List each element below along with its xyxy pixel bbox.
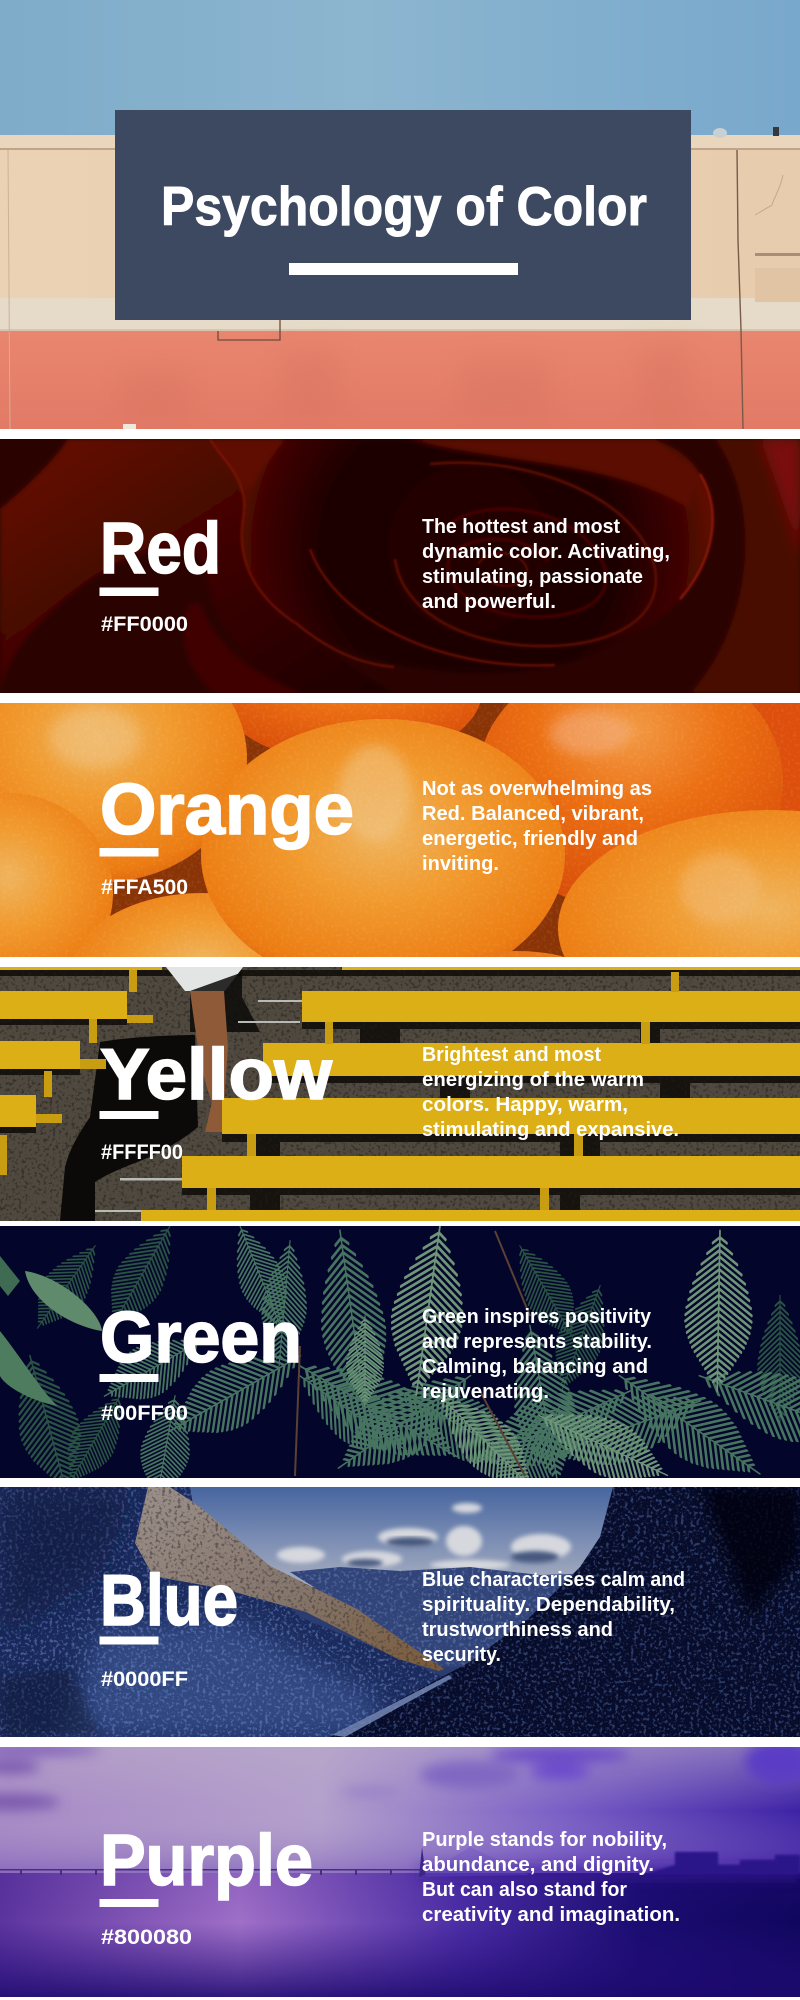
heading: Purple: Purple [100, 1821, 313, 1901]
description: stimulating and expansive. [422, 1118, 679, 1141]
description: abundance, and dignity. [422, 1853, 654, 1876]
hex code: #00FF00 [101, 1402, 188, 1425]
title underline [289, 263, 518, 275]
underline [100, 1636, 158, 1644]
description: Calming, balancing and [422, 1355, 648, 1378]
description: Blue characterises calm and [422, 1568, 685, 1591]
hex code: #FFFF00 [101, 1141, 183, 1164]
photo: oranges [0, 703, 800, 957]
photo: fern fronds [0, 1226, 800, 1478]
panel: green [0, 1214, 800, 1523]
title: Psychology of Color [161, 175, 647, 237]
description: security. [422, 1643, 501, 1666]
description: energetic, friendly and [422, 827, 638, 850]
description: The hottest and most [422, 515, 620, 538]
description: Green inspires positivity [422, 1305, 652, 1328]
description: dynamic color. Activating, [422, 540, 670, 563]
underline [100, 848, 158, 856]
underline [100, 1899, 158, 1907]
description: energizing of the warm [422, 1068, 644, 1091]
description: stimulating, passionate [422, 565, 643, 588]
description: and powerful. [422, 590, 556, 613]
description: and represents stability. [422, 1330, 652, 1353]
description: Red. Balanced, vibrant, [422, 802, 644, 825]
description: creativity and imagination. [422, 1903, 680, 1926]
title panel [115, 110, 691, 320]
heading: Red: Red [100, 509, 221, 589]
description [422, 1568, 685, 1666]
photo: red rose [0, 439, 800, 693]
description: But can also stand for [422, 1878, 627, 1901]
panel: red [0, 439, 800, 693]
description: Not as overwhelming as [422, 777, 652, 800]
panel: orange [0, 619, 800, 1057]
heading: Orange: Orange [100, 770, 354, 850]
description: trustworthiness and [422, 1618, 613, 1641]
description [422, 515, 670, 613]
description: spirituality. Dependability, [422, 1593, 675, 1616]
photo: building wall against the sky [0, 0, 800, 429]
panel: yellow [0, 967, 800, 1221]
photo: purple sea and bridge at dusk [0, 1747, 800, 1997]
description [422, 1305, 652, 1403]
hex code: #FFA500 [101, 876, 188, 899]
description: Purple stands for nobility, [422, 1828, 667, 1851]
hex code: #FF0000 [101, 613, 188, 636]
heading: Green: Green [100, 1298, 302, 1378]
heading: Blue: Blue [100, 1561, 238, 1641]
description: Brightest and most [422, 1043, 601, 1066]
description [422, 1043, 679, 1141]
description [422, 777, 652, 875]
photo: snowy mountains [0, 1487, 800, 1737]
panel: purple [0, 1740, 800, 1997]
description: colors. Happy, warm, [422, 1093, 628, 1116]
description [422, 1828, 680, 1926]
underline [100, 1374, 158, 1382]
photo: yellow benches on concrete steps [0, 967, 800, 1221]
description: rejuvenating. [422, 1380, 549, 1403]
underline [100, 588, 158, 596]
underline [100, 1111, 158, 1119]
hex code: #800080 [101, 1926, 192, 1949]
panel: blue [0, 1487, 800, 1737]
panel: title hero [0, 0, 800, 429]
heading: Yellow: Yellow [100, 1035, 333, 1115]
hex code: #0000FF [101, 1668, 188, 1691]
description: inviting. [422, 852, 499, 875]
